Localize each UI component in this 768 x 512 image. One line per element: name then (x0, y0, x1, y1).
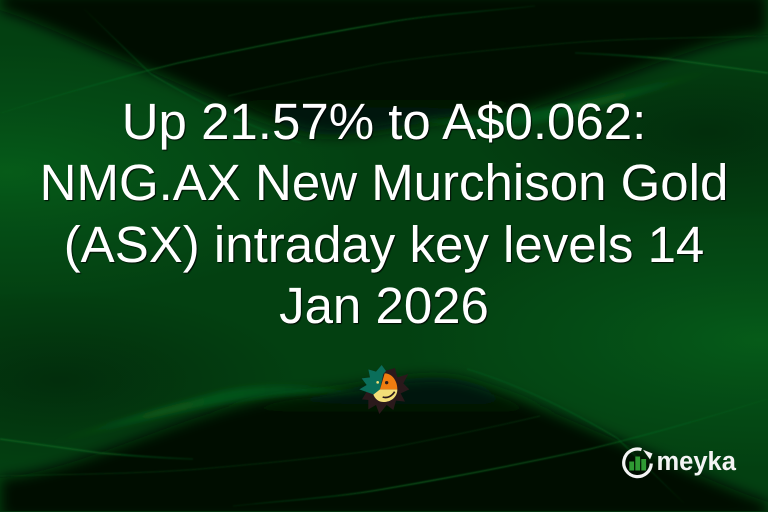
dark spiky sun (359, 365, 409, 414)
logo bars (629, 456, 646, 470)
icon: mascot sun face (360, 365, 410, 414)
logo: meyka (622, 447, 737, 478)
title: Jan 2026 (279, 277, 489, 334)
smile (383, 392, 395, 398)
logo ring (624, 449, 651, 477)
teal half of head (359, 365, 386, 395)
left eye (376, 381, 379, 384)
title: Up 21.57% to A$0.062: (122, 93, 646, 150)
title: NMG.AX New Murchison Gold (40, 154, 728, 211)
title (40, 93, 728, 334)
right eye (385, 381, 388, 384)
orange face (380, 373, 397, 389)
yellow face (373, 389, 397, 402)
logo wordmark: meyka (656, 448, 737, 476)
title: (ASX) intraday key levels 14 (64, 216, 704, 273)
